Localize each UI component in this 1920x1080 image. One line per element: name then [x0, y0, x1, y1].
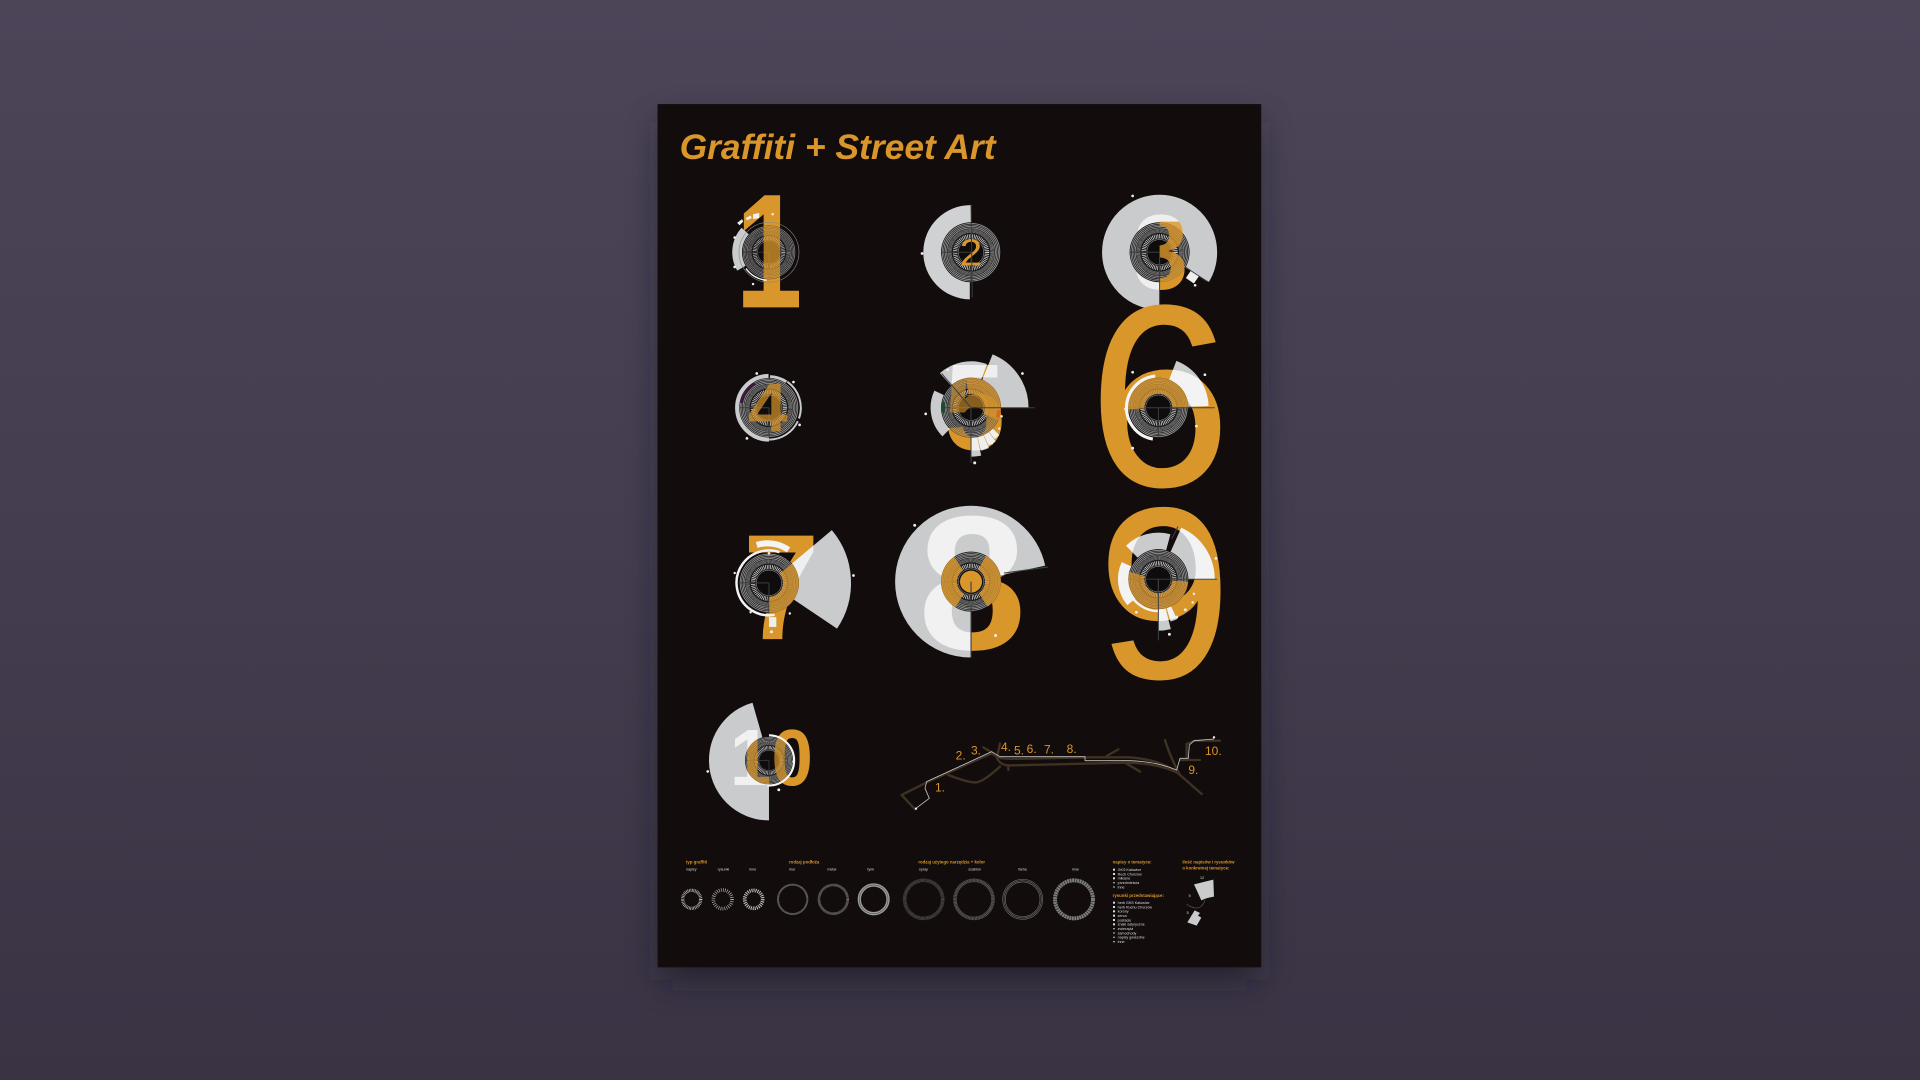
- legend: surface type: metal: [827, 868, 836, 872]
- map: endpoints: [915, 736, 1215, 810]
- legend: inscription themes: napisy o tematyce:: [1113, 860, 1152, 865]
- map: location numbers: 7.: [1044, 742, 1054, 756]
- legend: inscription themes: inne: [1118, 885, 1125, 889]
- chart 7: 7: [743, 503, 819, 672]
- chart 9: [1108, 506, 1221, 680]
- map: location numbers: 9.: [1188, 763, 1198, 777]
- legend: drawing themes: napisy gwiezdne: [1118, 936, 1145, 940]
- chart 5: 5: [945, 340, 1005, 476]
- map: location numbers: 10.: [1205, 744, 1222, 758]
- map: location numbers: 4.: [1001, 740, 1011, 754]
- legend: inscription themes: GKS Katowice: [1118, 868, 1141, 872]
- chart 5: [924, 354, 1035, 464]
- legend: drawing themes: zwierzęta: [1118, 927, 1134, 931]
- legend: graffiti type: [683, 860, 763, 909]
- legend: drawing themes: samochody: [1118, 931, 1137, 935]
- chart 5: 5: [945, 340, 1005, 476]
- legend: graffiti type: typ graffiti: [686, 860, 707, 865]
- legend: drawing themes: rysunki przedstawiające:: [1113, 893, 1164, 898]
- chart 6: 6: [1089, 253, 1230, 540]
- route map: [902, 736, 1222, 810]
- chart 8: 8: [918, 476, 1026, 690]
- legend: amount chart: ilość napisów i rysunków: [1182, 860, 1235, 865]
- chart 1: [732, 195, 800, 308]
- legend: drawing themes: herb GKS Katowice: [1118, 901, 1150, 905]
- legend: drawing themes: [1113, 893, 1164, 944]
- legend: amount chart: 12: [1200, 876, 1204, 880]
- chart 9: 9: [1098, 457, 1231, 729]
- legend: drawing themes: inne: [1118, 940, 1125, 944]
- legend: drawing themes: herb Ruchu Chorzów: [1118, 905, 1152, 909]
- legend: drawing themes: postacie: [1118, 918, 1131, 922]
- map: location numbers: 1.: [935, 780, 945, 794]
- chart 8: [895, 506, 1048, 658]
- legend: [683, 860, 1235, 944]
- chart 7: 7: [743, 503, 819, 672]
- chart 6: 6: [1089, 253, 1230, 540]
- chart 10: 10: [730, 714, 813, 802]
- legend: drawing themes: korony: [1118, 910, 1129, 914]
- chart 6: [1100, 304, 1220, 488]
- legend: drawing themes: serca: [1118, 914, 1128, 918]
- legend: tool and colour: rodzaj użytego narzędzia + kolor: [918, 860, 985, 865]
- title: Graffiti + Street Art: [680, 127, 998, 167]
- map: location numbers: 8.: [1067, 742, 1077, 756]
- legend: tool and colour: farba: [1018, 868, 1028, 872]
- legend: inscription themes: przedmieścia: [1118, 881, 1140, 885]
- legend: inscription themes: [1113, 860, 1152, 889]
- chart 2: [921, 204, 1001, 299]
- legend: tool and colour: szablon: [968, 868, 981, 872]
- legend: surface type: [778, 860, 888, 914]
- chart 3: 3: [1134, 192, 1188, 312]
- legend: graffiti type: rysunki: [718, 868, 729, 872]
- legend: inscription themes: Ruch Chorzów: [1118, 872, 1142, 876]
- legend: tool and colour: inne: [1072, 868, 1079, 872]
- chart 9: 9: [1098, 457, 1231, 729]
- map: streets: [902, 740, 1220, 809]
- legend: surface type: mur: [789, 868, 796, 872]
- map: route: [916, 739, 1214, 808]
- map: location numbers: 2.: [956, 748, 966, 762]
- map: location numbers: 6.: [1027, 742, 1037, 756]
- legend: amount chart: 5: [1189, 894, 1191, 898]
- chart 5: 5: [945, 340, 1005, 476]
- legend: inscription themes: miłosne: [1118, 877, 1130, 881]
- chart 3: 3: [1134, 192, 1188, 312]
- poster: [658, 104, 1261, 967]
- legend: graffiti type: napisy: [686, 868, 697, 872]
- legend: tool and colour: spray: [919, 868, 928, 872]
- legend: tool and colour: [905, 860, 1093, 919]
- legend: amount chart: [1182, 860, 1235, 926]
- chart 8: 8: [918, 476, 1026, 690]
- legend: graffiti type: inne: [749, 868, 756, 872]
- legend: amount chart: 5: [1187, 911, 1189, 915]
- chart 2: 2: [960, 233, 982, 274]
- legend: amount chart: o konkretnej tematyce:: [1182, 866, 1230, 871]
- chart 1: 1: [736, 162, 802, 343]
- poster shadow: [661, 122, 1258, 980]
- chart 3: [1116, 192, 1207, 312]
- chart 7: [734, 530, 855, 640]
- chart 4: 4: [748, 369, 788, 446]
- chart 1: 1: [736, 162, 802, 343]
- map: location numbers: 3.: [971, 743, 981, 757]
- chart 10: 10: [730, 714, 813, 802]
- map: location numbers: 5.: [1014, 744, 1024, 758]
- legend: surface type: tynk: [867, 868, 874, 872]
- chart 3: 3: [1134, 192, 1188, 312]
- legend: surface type: rodzaj podłoża: [789, 860, 820, 865]
- legend: drawing themes: znaki satyryczne: [1118, 923, 1145, 927]
- map: location numbers: [935, 740, 1222, 794]
- chart 4: [735, 372, 802, 442]
- chart 10: 10: [730, 714, 813, 802]
